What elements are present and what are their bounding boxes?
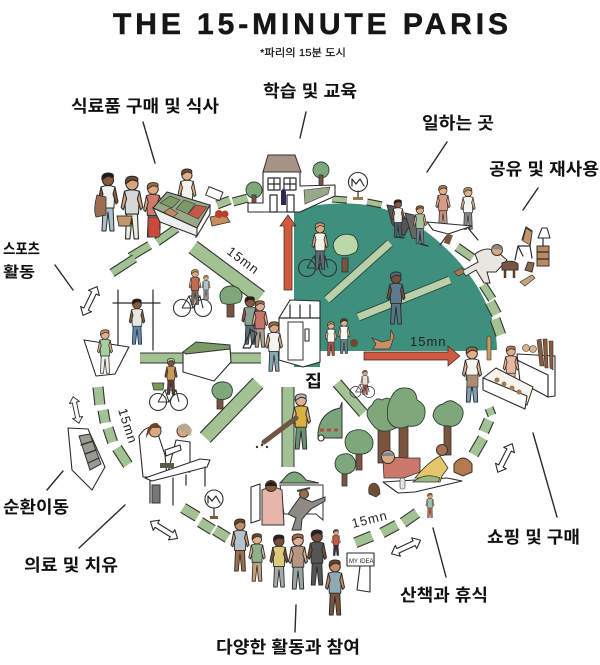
scene: stroller couple [242,297,268,348]
leader lines [47,112,557,632]
label: work: 일하는 곳 [422,114,494,133]
label: sports: 스포츠 [3,241,40,258]
icon: vehicle hub [68,428,105,490]
teal 15-minute sector [294,203,497,367]
icon: metro sign bottom [205,490,223,519]
scene: doctor [139,423,210,505]
scene: sports [84,290,160,376]
scene: home [266,300,320,371]
label: learning: 학습 및 교육 [263,82,357,101]
label: medical: 의료 및 치유 [24,556,118,575]
scene: crowd [231,519,374,615]
icon: tree near family [220,286,242,317]
label: activities: 다양한 활동과 참여 [216,638,360,657]
15mn labels [115,243,447,531]
label: walk and rest: 산책과 휴식 [400,586,488,605]
double arrows [68,284,518,559]
icon: tree near planter [212,382,232,409]
15mn labels: 15mn [410,334,447,349]
label: shopping: 쇼핑 및 구매 [487,528,580,547]
scene: stage performance [251,472,325,530]
scene: cyclist below home [350,370,375,398]
subtitle: *파리의 15분 도시 [260,47,346,59]
icon: metro sign top [348,172,368,200]
title: THE 15-MINUTE PARIS [113,8,508,41]
scene: cyclist on teal [298,223,336,276]
scene: family cycling [174,270,212,316]
label: sports: 활동 [3,264,35,281]
ring dashes [93,194,506,547]
scene: gardener and blower [256,394,342,449]
scene: officer on teal [387,272,405,324]
red arrow: north [280,215,296,290]
scene: kids and dogs on teal [325,319,394,355]
scene: coworking [387,186,478,246]
label: home: 집 [305,372,322,391]
scene: planter and delivery cyclist [150,342,231,410]
scene: market [95,169,230,239]
label: food: 식료품 구매 및 식사 [71,97,219,116]
label: share and reuse: 공유 및 재사용 [489,160,599,179]
scene: crowd: MY IDEA [349,559,374,565]
scene: repair and reuse [454,227,550,286]
street spokes [140,240,451,467]
label: mobility: 순환이동 [3,498,69,517]
15mn labels: 15mn [224,243,262,277]
label: sports [3,241,40,281]
scene: school [246,155,335,212]
15mn labels: 15mn [115,406,141,446]
15mn labels: 15mn [350,508,389,531]
red arrow: east [364,346,460,366]
scene: park [335,388,472,518]
icon: tree on teal [333,234,358,272]
scene: shop [462,336,555,409]
